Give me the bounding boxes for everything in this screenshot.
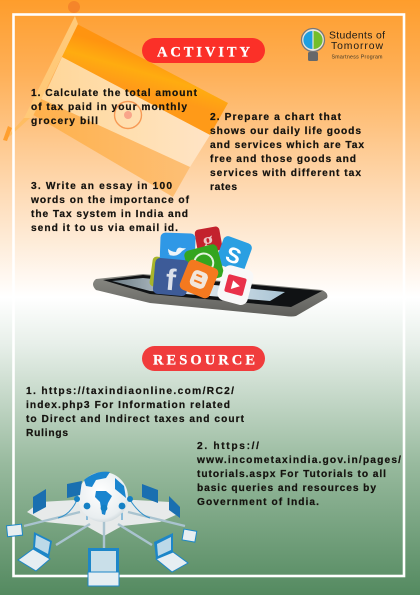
desktop monitors — [33, 481, 180, 518]
icon: skype — [215, 235, 253, 273]
small devices — [7, 524, 197, 542]
text: resource 2 — [196, 441, 401, 508]
icon: lime app — [149, 256, 183, 290]
text: resource 2: 2. https:// — [197, 441, 259, 452]
text: resource 1 — [26, 386, 245, 439]
text: activity 2: shows our daily life goods — [210, 126, 361, 137]
icon: facebook: f — [164, 264, 178, 297]
icon: skype: S — [222, 241, 245, 270]
text: resource 2: Government of India. — [197, 497, 319, 508]
text: activity 3: send it to us via email id. — [31, 223, 178, 234]
text: activity 3 — [30, 181, 190, 234]
heading: Resource — [142, 346, 265, 371]
text: activity 1: of tax paid in your monthly — [31, 102, 187, 113]
heading: Resource: RESOURCE — [153, 352, 255, 368]
text: activity 3: the Tax system in India and — [31, 209, 188, 220]
text: activity 3: words on the importance of — [30, 195, 190, 206]
text: resource 2: basic queries and resources by — [197, 483, 376, 494]
text: activity 2: and services which are Tax — [210, 140, 364, 151]
logo: Students of Tomorrow: Tomorrow — [331, 41, 383, 52]
icon: facebook — [152, 258, 190, 298]
laptop centre — [88, 548, 119, 586]
icon: google plus — [194, 226, 223, 254]
heading: Activity: ACTIVITY — [157, 44, 251, 60]
text: activity 2: services with different tax — [210, 168, 361, 179]
text: resource 2: tutorials.aspx For Tutorials to all — [197, 469, 386, 480]
text: resource 2: www.incometaxindia.gov.in/pages/ — [196, 455, 401, 466]
text: activity 2: 2. Prepare a chart that — [210, 112, 342, 123]
logo: Students of Tomorrow: Smartness Program — [332, 54, 382, 60]
icon: youtube — [216, 264, 255, 307]
icon: whatsapp — [183, 243, 225, 285]
text: resource 1: Rulings — [26, 428, 68, 439]
text: activity 1 — [31, 88, 198, 127]
text: resource 1: to Direct and Indirect taxes and court — [26, 414, 245, 425]
logo: Students of Tomorrow — [302, 28, 385, 61]
globe — [74, 472, 133, 522]
illustration: phone with app icons — [93, 226, 327, 316]
laptop left — [18, 532, 52, 571]
icon: blogger — [178, 258, 220, 300]
text: activity 3: 3. Write an essay in 100 — [31, 181, 172, 192]
icon: google plus: g — [201, 227, 216, 253]
text: activity 1: 1. Calculate the total amount — [31, 88, 198, 99]
icon: twitter — [159, 232, 196, 272]
logo: Students of Tomorrow: Students of — [329, 30, 385, 42]
illustration: Indian flag — [3, 1, 228, 197]
heading: Activity — [142, 38, 265, 63]
text: activity 1: grocery bill — [31, 116, 98, 127]
text: activity 2: rates — [210, 182, 237, 193]
text: resource 1: index.php3 For Information related — [26, 400, 230, 411]
text: activity 2 — [210, 112, 364, 193]
text: activity 2: free and those goods and — [210, 154, 356, 165]
text: resource 1: 1. https://taxindiaonline.com/RC2/ — [26, 386, 234, 397]
laptop right — [154, 533, 188, 572]
illustration: computer network with globe — [7, 472, 197, 586]
